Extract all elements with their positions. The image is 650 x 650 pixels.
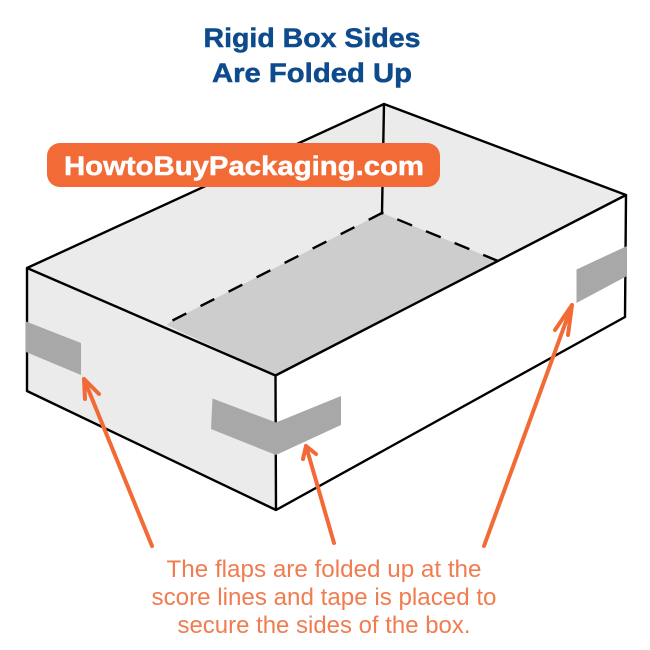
tape: middle corner [211, 396, 341, 455]
box outlines [27, 104, 626, 510]
caption: The flaps are folded up at the [166, 556, 482, 583]
caption: score lines and tape is placed to [152, 584, 497, 611]
watermark badge [47, 143, 440, 187]
arrow: right tape [484, 305, 572, 546]
tape: left [26, 322, 81, 375]
title: Are Folded Up [212, 58, 412, 88]
box illustration [26, 104, 627, 510]
arrow: left tape [84, 379, 152, 546]
caption: secure the sides of the box. [178, 612, 470, 639]
left outer side [27, 268, 276, 510]
right outer side [276, 195, 626, 510]
arrow: middle tape [303, 446, 334, 543]
box top rim and inner walls [27, 104, 626, 376]
watermark badge: HowtoBuyPackaging.com [64, 151, 424, 181]
title: Rigid Box Sides [204, 23, 420, 53]
caption [152, 556, 497, 639]
title [204, 23, 420, 88]
tape: right [576, 246, 627, 303]
score lines [172, 213, 498, 320]
box floor [166, 213, 498, 376]
